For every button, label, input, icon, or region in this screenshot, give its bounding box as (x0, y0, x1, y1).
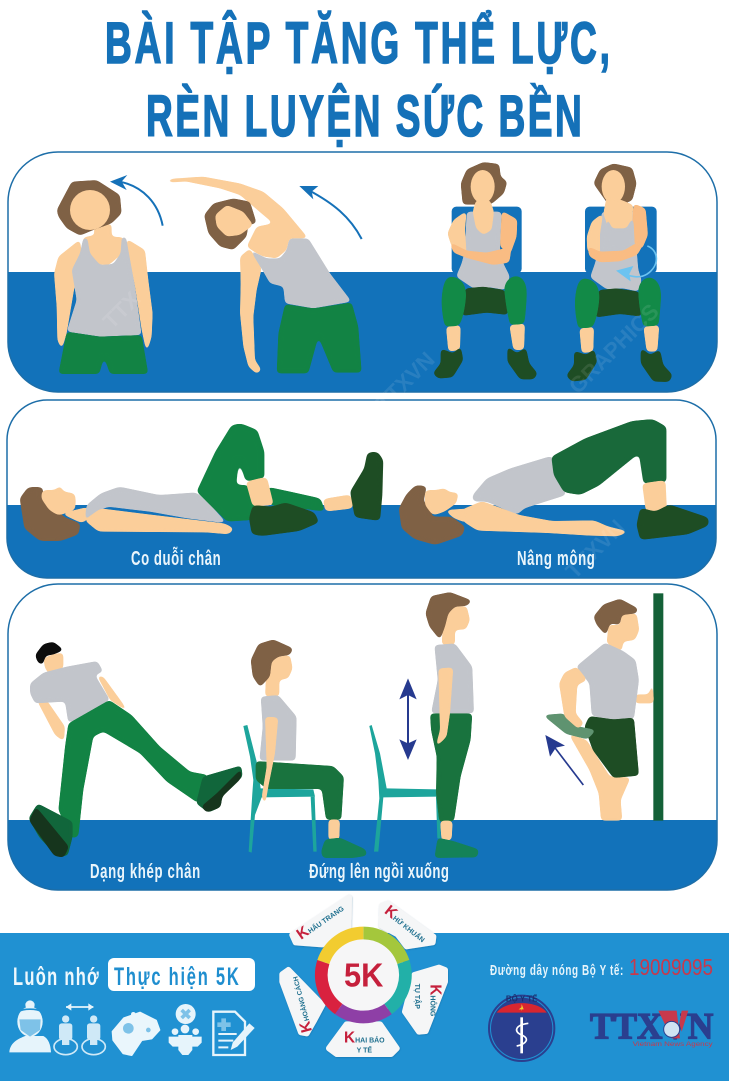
label: leg abduction: Dạng khép chân (90, 860, 200, 883)
arrow: side bend (299, 186, 362, 239)
watermarks (98, 286, 664, 584)
figure: leg curl (20, 423, 383, 541)
title: RÈN LUYỆN SỨC BỀN (146, 84, 582, 149)
figure: head tilt (54, 180, 153, 374)
5K wheel (282, 898, 445, 1055)
hotline (490, 954, 713, 980)
icon: distance (54, 1003, 105, 1055)
petal: khoang cach (282, 970, 322, 1034)
watermarks: TTXVN (561, 515, 630, 584)
figure: seated facing front (433, 162, 538, 379)
slogan: Luôn nhớ (13, 964, 100, 991)
petal: khu khuan: KHỬ KHUẨN (381, 902, 430, 946)
logo: ministry of health (489, 994, 554, 1061)
petal: khai bao y te: Y TẾ (357, 1045, 372, 1055)
icons: 5K actions (9, 1000, 255, 1055)
logo: TTXVN: Vietnam News Agency (633, 1041, 713, 1048)
figure: quad stretch (543, 593, 663, 821)
icon: washing hands (113, 1012, 159, 1055)
logo: ministry of health: BỘ Y TẾ (506, 994, 538, 1004)
petal: khoang cach: KHOẢNG CÁCH (285, 975, 316, 1034)
ring (321, 933, 405, 1017)
footer band (0, 933, 729, 1081)
figure: seated twisting (566, 163, 673, 382)
petal: khong tu tap: TỤ TẬP (413, 984, 422, 1009)
watermarks: GRAPHICS (564, 299, 664, 399)
arrow: head tilt (110, 175, 163, 226)
icon: mask (9, 1000, 51, 1052)
hotline: Đường dây nóng Bộ Y tế: (490, 962, 623, 979)
title: BÀI TẬP TĂNG THỂ LỰC, (105, 11, 610, 76)
icon: health declaration (213, 1012, 255, 1055)
panel: neck, side bend and seated twist (8, 152, 717, 392)
petal: khai bao y te (329, 1024, 397, 1055)
label: leg curl: Co duỗi chân (131, 547, 221, 570)
label: stand and sit: Đứng lên ngồi xuống (309, 860, 449, 883)
logo: TTXVN: TTXVN (590, 1005, 713, 1046)
figure: glute bridge (399, 419, 709, 545)
petal: khong tu tap (405, 968, 445, 1032)
watermarks: TTX (98, 286, 145, 334)
panel: lying exercises (7, 400, 716, 578)
title (105, 11, 610, 149)
petal: khau trang: KHẨU TRANG (294, 899, 347, 943)
figure: side bend (165, 177, 362, 374)
figure: sitting on chair (243, 639, 367, 858)
panel: standing and chair exercises (8, 584, 717, 890)
label: glute bridge: Nâng mông (517, 547, 595, 570)
figure: standing from chair (369, 592, 479, 858)
arrow: stretch direction (545, 735, 583, 785)
hotline: 19009095 (629, 954, 713, 980)
slogan (13, 958, 255, 991)
figure: leg abduction (28, 642, 243, 858)
watermarks: TTXVN (371, 347, 440, 416)
5K mark: 5K (344, 958, 383, 995)
arrow: up and down (399, 678, 417, 760)
petal: khai bao y te: KHAI BÁO (344, 1029, 385, 1046)
petal: khong tu tap: K HÔNG (427, 984, 444, 1016)
icon: no gathering (169, 1004, 202, 1055)
slogan: Thực hiện 5K (114, 964, 239, 991)
arrow: twist (616, 246, 656, 281)
